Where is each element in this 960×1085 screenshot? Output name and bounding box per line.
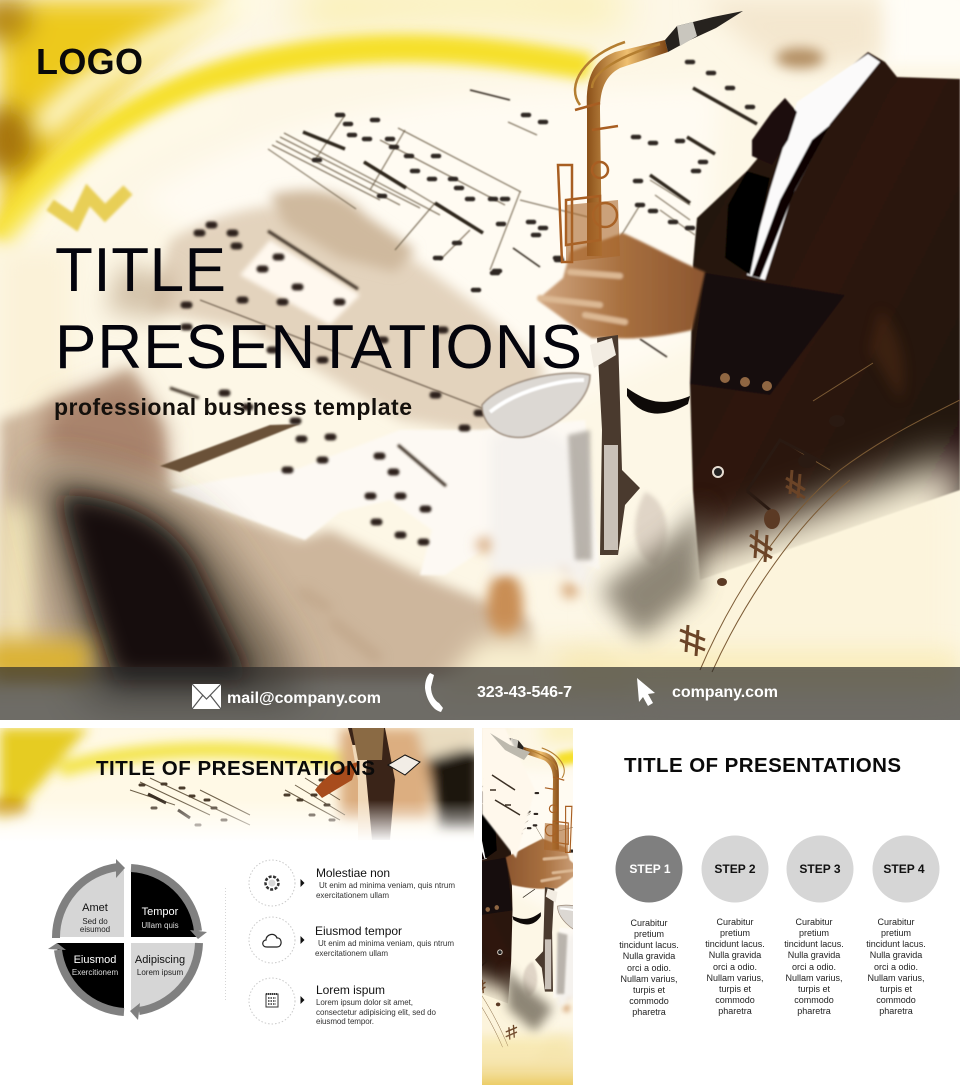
- step 4: STEP 4: [883, 862, 925, 876]
- step 1: commodo: [629, 996, 669, 1006]
- segment: Adipiscing: [131, 943, 198, 1010]
- step 2: orci a odio.: [713, 962, 757, 972]
- cycle diagram: [48, 859, 207, 1020]
- segment: Amet: eisumod: [80, 925, 110, 934]
- list item: Lorem ispum: Lorem ispum: [316, 983, 385, 997]
- main title: [55, 236, 582, 382]
- step 2: Nulla gravida: [709, 950, 761, 960]
- step 3: tincidunt lacus.: [784, 939, 844, 949]
- step 3: STEP 3: [799, 862, 841, 876]
- list item: Eiusmod tempor: Eiusmod tempor: [315, 924, 402, 938]
- step 4: turpis et: [880, 984, 913, 994]
- list item: Lorem ispum: [249, 978, 437, 1026]
- list item: Eiusmod tempor: Ut enim ad minima veniam, quis ntrum: [318, 939, 454, 948]
- main title: PRESENTATIONS: [55, 313, 582, 382]
- segment: Adipiscing: Adipiscing: [135, 954, 185, 966]
- segment: Amet: Sed do: [82, 917, 108, 926]
- step 4: pretium: [881, 928, 911, 938]
- list item: Molestiae non: [249, 860, 455, 906]
- arrows: cycle ring: [48, 859, 207, 1020]
- segment: Adipiscing: Lorem ipsum: [137, 968, 183, 977]
- step 3: turpis et: [798, 984, 831, 994]
- step 2: STEP 2: [714, 862, 756, 876]
- icon: calendar: [249, 978, 295, 1024]
- step 2: commodo: [715, 995, 755, 1005]
- list item: Eiusmod tempor: exercitationem ullam: [315, 949, 388, 958]
- subtitle: professional business template: [54, 394, 412, 420]
- icon: cloud: [249, 917, 295, 963]
- icon: gear: [249, 860, 295, 906]
- step 1: Nulla gravida: [623, 951, 675, 961]
- slide 2 title: TITLE OF PRESENTATIONS: [624, 754, 901, 777]
- step 1: pretium: [634, 929, 664, 939]
- step 2: Nullam varius,: [706, 973, 764, 983]
- step 2: Curabitur: [716, 917, 754, 927]
- segment: Amet: [57, 870, 124, 937]
- list item: Lorem ispum: consectetur adipisicing elit, sed do: [316, 1008, 437, 1017]
- step 4: [866, 836, 940, 1016]
- step 1: turpis et: [633, 985, 666, 995]
- step 4: pharetra: [879, 1006, 913, 1016]
- segment: Eiusmod: Exercitionem: [72, 968, 118, 977]
- step 4: Nullam varius,: [867, 973, 925, 983]
- icon: phone: [425, 673, 443, 712]
- step 4: orci a odio.: [874, 962, 918, 972]
- slide 2 side image: [482, 728, 573, 1085]
- step 2: turpis et: [719, 984, 752, 994]
- slide 1 header image: [0, 722, 480, 842]
- step 3: Curabitur: [795, 917, 833, 927]
- step 2: pretium: [720, 928, 750, 938]
- step 3: Nullam varius,: [785, 973, 843, 983]
- segment: Eiusmod: [57, 943, 124, 1010]
- step 4: tincidunt lacus.: [866, 939, 926, 949]
- dotted divider: [224, 888, 226, 1000]
- step 3: [784, 836, 854, 1016]
- segment: Tempor: [131, 870, 198, 937]
- list item: Lorem ispum: eiusmod tempor.: [316, 1017, 374, 1026]
- list item: Eiusmod tempor: [249, 917, 454, 963]
- step 4: commodo: [876, 995, 916, 1005]
- step 1: STEP 1: [629, 862, 671, 876]
- list item: Molestiae non: exercitationem ullam: [316, 891, 389, 900]
- list item: Lorem ispum: Lorem ipsum dolor sit amet,: [316, 998, 413, 1007]
- slide 1 title: TITLE OF PRESENTATIONS: [96, 757, 375, 780]
- step 2: [702, 836, 768, 1016]
- step 3: pharetra: [797, 1006, 831, 1016]
- segment: Amet: Amet: [82, 902, 108, 914]
- step 2: pharetra: [718, 1006, 752, 1016]
- segment: Eiusmod: Eiusmod: [74, 954, 116, 966]
- step 1: [616, 836, 682, 1017]
- step 1: tincidunt lacus.: [619, 940, 679, 950]
- icon: cursor: [637, 678, 655, 706]
- step 1: pharetra: [632, 1007, 666, 1017]
- step 4: Nulla gravida: [870, 950, 922, 960]
- segment: Tempor: Ullam quis: [141, 921, 179, 930]
- step 3: commodo: [794, 995, 834, 1005]
- hero panel: photo collage: [0, 0, 960, 720]
- step 3: orci a odio.: [792, 962, 836, 972]
- icon: mail: [192, 684, 221, 709]
- step 3: pretium: [799, 928, 829, 938]
- logo: LOGO: [36, 41, 143, 82]
- phone number: 323-43-546-7: [477, 684, 572, 701]
- segment: Tempor: Tempor: [142, 906, 179, 918]
- email address: mail@company.com: [227, 690, 381, 707]
- step 1: Nullam varius,: [620, 974, 678, 984]
- step 1: orci a odio.: [627, 963, 671, 973]
- list item: Molestiae non: Molestiae non: [316, 866, 390, 880]
- website: company.com: [672, 684, 778, 701]
- step 3: Nulla gravida: [788, 950, 840, 960]
- step 4: Curabitur: [877, 917, 915, 927]
- step 1: Curabitur: [630, 918, 668, 928]
- contact bar: [0, 667, 960, 720]
- step 2: tincidunt lacus.: [705, 939, 765, 949]
- list item: Molestiae non: Ut enim ad minima veniam, quis ntrum: [319, 881, 455, 890]
- main title: TITLE: [55, 236, 226, 305]
